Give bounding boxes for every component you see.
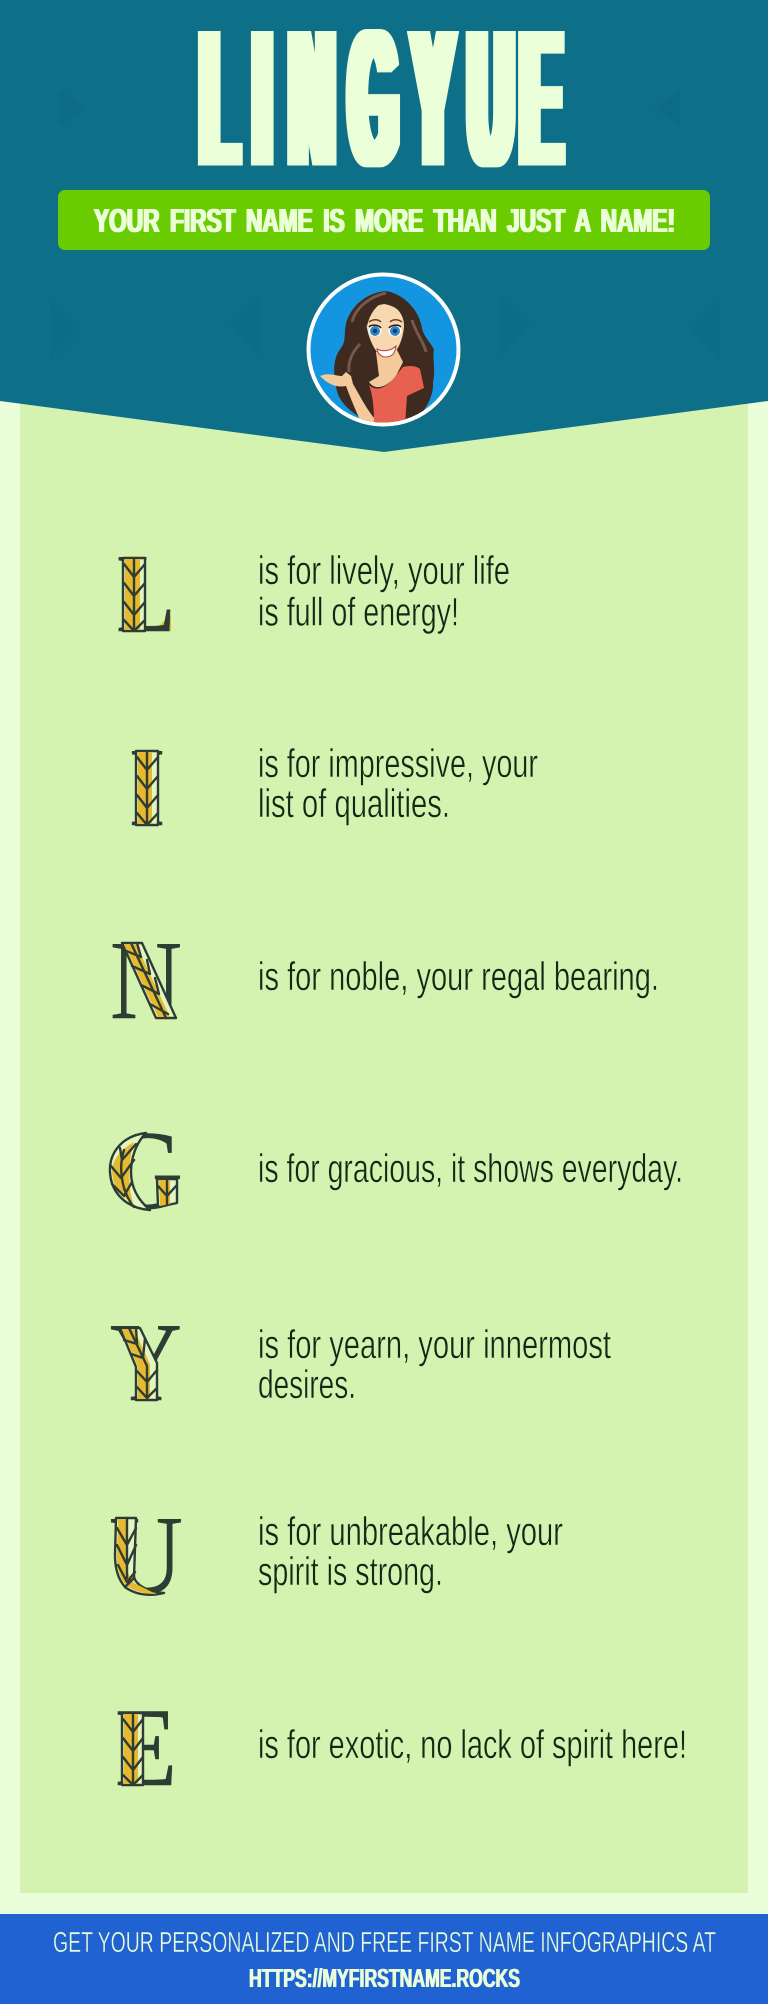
icon: letter Y: Y — [110, 1301, 182, 1425]
row: N — [110, 919, 659, 1043]
icon: letter G: G — [109, 1109, 183, 1233]
text: Y line two: desires. — [258, 1363, 356, 1407]
text: U line two: spirit is strong. — [258, 1550, 443, 1594]
text: U line: is for unbreakable, your — [258, 1510, 563, 1554]
text: L line two: is full of energy! — [258, 590, 459, 634]
row: Y — [110, 1301, 611, 1425]
icon: letter I: I — [128, 726, 166, 850]
header band with chevron — [0, 0, 768, 452]
icon: letter U: U — [109, 1494, 183, 1618]
icon: letter L: L — [116, 532, 176, 656]
row: I — [128, 726, 538, 850]
row: L — [116, 532, 510, 656]
text: I line: is for impressive, your — [258, 742, 538, 786]
panel: letters background — [20, 380, 748, 1893]
icon: letter N: N — [110, 919, 182, 1043]
row: G — [109, 1109, 683, 1233]
row: U — [109, 1494, 563, 1618]
banner — [58, 190, 710, 250]
footer — [0, 1914, 768, 2004]
text: Y line: is for yearn, your innermost — [258, 1323, 611, 1367]
text: L line: is for lively, your life — [258, 549, 510, 593]
text: I line two: list of qualities. — [258, 782, 450, 826]
icon: letter E: E — [115, 1686, 177, 1810]
row: E — [115, 1686, 687, 1810]
portrait: cartoon woman in circle — [308, 274, 458, 428]
footer link: HTTPS://MYFIRSTNAME.ROCKS — [249, 1963, 520, 1993]
